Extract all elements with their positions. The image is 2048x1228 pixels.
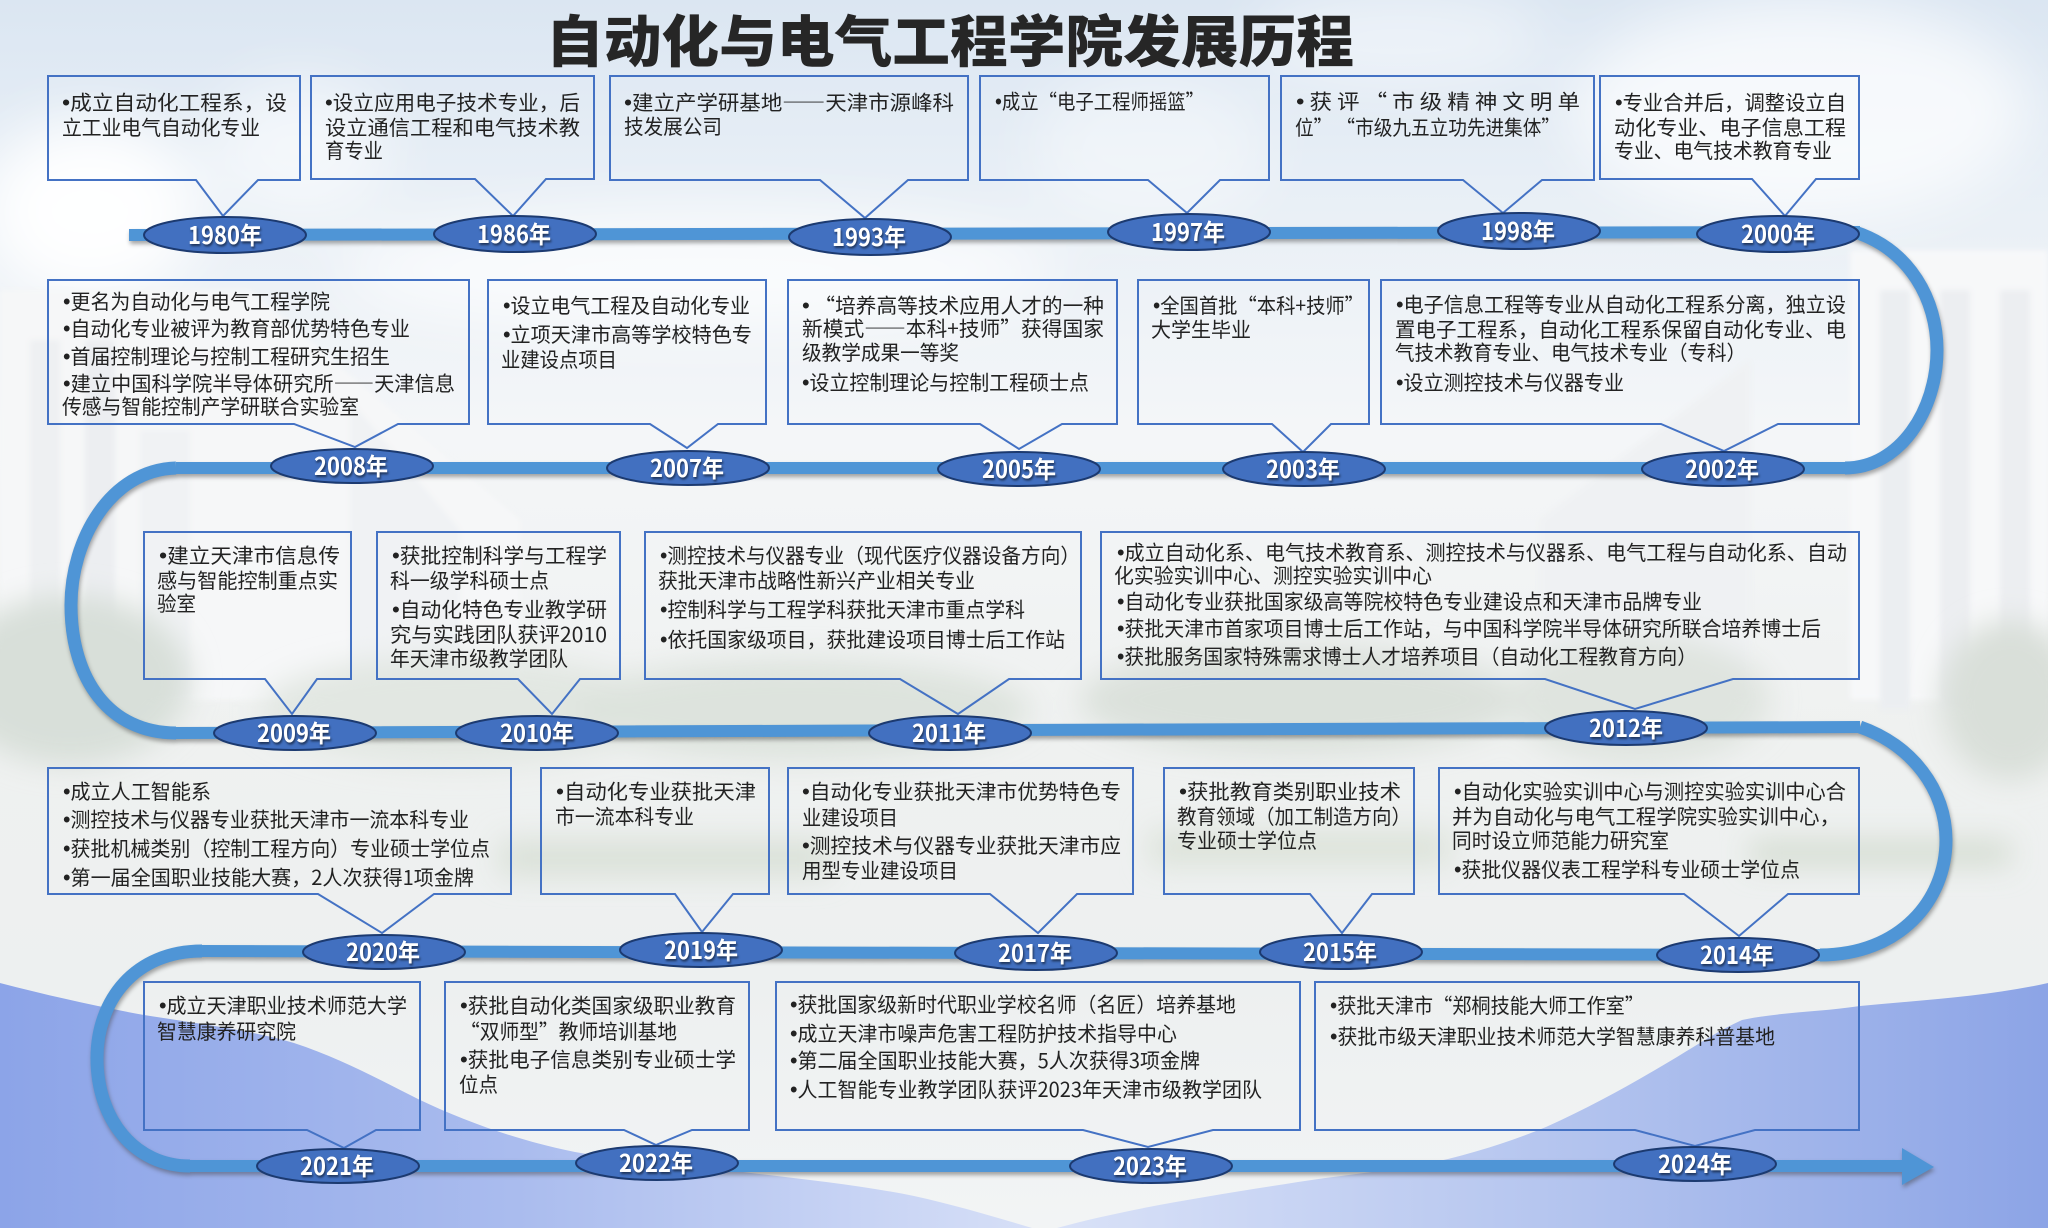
year badge 2012 [1545, 709, 1707, 745]
panel: 2020: •成立人工智能系 [63, 775, 211, 805]
year badge 1997 [1108, 213, 1270, 250]
panel: 2012: •自动化专业获批国家级高等院校特色专业建设点和天津市品牌专业 [1117, 585, 1702, 615]
panel: 2024: •获批天津市“郑桐技能大师工作室” [1330, 989, 1644, 1019]
panel: 2017: 用型专业建设项目 [802, 854, 958, 884]
year badge 2023: 2023年 [1113, 1147, 1187, 1182]
year badge 2008 [271, 447, 433, 483]
decorative blue wave, left [0, 983, 1032, 1228]
panel: 2005: 级教学成果一等奖 [802, 336, 959, 366]
panel: 2000 [1600, 76, 1859, 216]
panel: 2014: 并为自动化与电气工程学院实验实训中心， [1452, 800, 1840, 830]
panel: 2010: 科一级学科硕士点 [390, 564, 549, 594]
panel: 2005: 新模式——本科+技师”获得国家 [802, 312, 1104, 342]
panel: 1986: •设立应用电子技术专业，后 [325, 86, 580, 116]
panel: 2015: •获批教育类别职业技术 [1179, 775, 1401, 805]
panel: 2008: •自动化专业被评为教育部优势特色专业 [63, 312, 410, 342]
panel: 2010: 究与实践团队获评2010 [390, 618, 607, 648]
panel: 2003 [1138, 280, 1369, 452]
decorative blue wave, right [1032, 983, 2048, 1228]
panel: 2012: •成立自动化系、电气技术教育系、测控技术与仪器系、电气工程与自动化系、自动 [1117, 536, 1847, 566]
year badge 2011: 2011年 [912, 714, 986, 749]
panel: 1986 [311, 76, 594, 216]
panel: 2019: 市一流本科专业 [555, 800, 694, 830]
year badge 2020 [303, 933, 465, 969]
title: 自动化与电气工程学院发展历程 [546, 0, 1354, 79]
year badge 2020: 2020年 [346, 933, 420, 968]
year badge 2015 [1260, 933, 1422, 969]
panel: 2014: •获批仪器仪表工程学科专业硕士学位点 [1454, 853, 1800, 883]
panel: 2015: 教育领域（加工制造方向） [1177, 800, 1411, 830]
panel: 1997: •成立“电子工程师摇篮” [995, 85, 1204, 115]
year badge 2009: 2009年 [257, 714, 331, 749]
panel: 2021: •成立天津职业技术师范大学 [159, 989, 407, 1019]
panel: 2022: “双师型”教师培训基地 [460, 1015, 677, 1045]
panel: 2002 [1381, 280, 1859, 451]
panel: 2007: •立项天津市高等学校特色专 [503, 318, 752, 348]
year badge 2021: 2021年 [300, 1147, 374, 1182]
panel: 2008: •首届控制理论与控制工程研究生招生 [63, 340, 390, 370]
year badge 2019 [620, 931, 782, 967]
panel: 1998: 位” “市级九五立功先进集体” [1295, 111, 1560, 141]
panel: 2021: 智慧康养研究院 [157, 1015, 296, 1045]
panel: 2019: •自动化专业获批天津 [556, 775, 756, 805]
panel: 2017 [788, 768, 1133, 933]
panel: 2011: •控制科学与工程学科获批天津市重点学科 [660, 593, 1025, 623]
panel: 2023: •人工智能专业教学团队获评2023年天津市级教学团队 [790, 1073, 1262, 1103]
panel: 2020: •测控技术与仪器专业获批天津市一流本科专业 [63, 803, 469, 833]
panel: 2022: •获批自动化类国家级职业教育 [460, 989, 736, 1019]
year badge 2005 [938, 450, 1100, 486]
panel: 1986: 设立通信工程和电气技术教 [325, 111, 580, 141]
panel: 1997 [980, 76, 1269, 213]
panel: 2000: 动化专业、电子信息工程 [1614, 111, 1846, 141]
year badge 1993: 1993年 [832, 218, 906, 253]
panel: 2023: •第二届全国职业技能大赛，5人次获得3项金牌 [790, 1044, 1200, 1074]
year badge 1998 [1438, 212, 1600, 249]
panel: 2017: •测控技术与仪器专业获批天津市应 [802, 829, 1121, 859]
panel: 1993: 技发展公司 [624, 110, 722, 140]
panel: 2012 [1101, 532, 1859, 709]
year badge 2012: 2012年 [1589, 709, 1663, 744]
year badge 2022 [576, 1144, 738, 1180]
panel: 2015: 专业硕士学位点 [1177, 824, 1317, 854]
year badge 2014 [1657, 936, 1819, 972]
panel: 2009: •建立天津市信息传 [159, 539, 340, 569]
year badge 2007: 2007年 [650, 449, 724, 484]
panel: 2015 [1164, 768, 1414, 933]
year badge 2024: 2024年 [1658, 1145, 1732, 1180]
panel: 2005 [788, 280, 1117, 449]
panel: 2023 [776, 982, 1300, 1147]
timeline ribbon with arrow [71, 232, 1946, 1185]
panel: 2003: •全国首批“本科+技师” [1153, 289, 1364, 319]
panel: 2023: •成立天津市噪声危害工程防护技术指导中心 [790, 1017, 1177, 1047]
panel: 2024 [1315, 982, 1859, 1146]
panel: 1993 [610, 76, 968, 218]
panel: 2017: •自动化专业获批天津市优势特色专 [802, 775, 1121, 805]
panel: 2002: 置电子工程系，自动化工程系保留自动化专业、电 [1395, 313, 1846, 343]
year badge 2023 [1070, 1147, 1232, 1183]
year badge 2015: 2015年 [1303, 933, 1377, 968]
year badge 2008: 2008年 [314, 447, 388, 482]
panel: 2010: •自动化特色专业教学研 [392, 593, 607, 623]
year badge 2019: 2019年 [664, 931, 738, 966]
year badge 2007 [607, 449, 769, 485]
panel: 2011: •依托国家级项目，获批建设项目博士后工作站 [660, 623, 1065, 653]
panel: 2020: •第一届全国职业技能大赛，2人次获得1项金牌 [63, 861, 474, 891]
panel: 2000: 专业、电气技术教育专业 [1614, 134, 1832, 164]
panel: 2021 [144, 982, 420, 1148]
year badge 2014: 2014年 [1700, 936, 1774, 971]
panel: 1993: •建立产学研基地——天津市源峰科 [624, 86, 954, 116]
panel: 2010: •获批控制科学与工程学 [392, 539, 607, 569]
year badge 2003 [1223, 450, 1385, 486]
panel: 2014 [1439, 768, 1859, 936]
year badge 2010 [456, 714, 618, 750]
year badge 2003: 2003年 [1266, 450, 1340, 485]
year badge 2011 [869, 714, 1031, 750]
year badge 1986: 1986年 [477, 215, 551, 250]
year badge 2005: 2005年 [982, 450, 1056, 485]
panel: 1998 [1281, 76, 1594, 213]
year badge 2021 [257, 1147, 419, 1183]
panel: 2012: 化实验实训中心、测控实验实训中心 [1114, 559, 1432, 589]
panel: 2011 [645, 532, 1081, 714]
year badge 1998: 1998年 [1481, 212, 1555, 247]
year badge 1993 [789, 218, 951, 255]
year badge 1986 [434, 215, 596, 252]
panel: 2012: •获批服务国家特殊需求博士人才培养项目（自动化工程教育方向） [1117, 640, 1697, 670]
panel: 2008: 传感与智能控制产学研联合实验室 [62, 390, 359, 420]
panel: 1980 [48, 76, 300, 216]
year badge 2017: 2017年 [998, 934, 1072, 969]
panel: 2020: •获批机械类别（控制工程方向）专业硕士学位点 [63, 832, 490, 862]
year badge 2000: 2000年 [1741, 215, 1815, 250]
year badge 2009 [214, 714, 376, 750]
panel: 2010 [377, 532, 620, 714]
panel: 2008: •更名为自动化与电气工程学院 [63, 285, 330, 315]
panel: 2002: 气技术教育专业、电气技术专业（专科） [1395, 336, 1746, 366]
panel: 1980: 立工业电气自动化专业 [62, 111, 260, 141]
panel: 2017: 业建设项目 [802, 801, 898, 831]
panel: 2002: •电子信息工程等专业从自动化工程系分离，独立设 [1396, 288, 1846, 318]
year badge 1980: 1980年 [188, 216, 262, 251]
panel: 2003: 大学生毕业 [1151, 313, 1251, 343]
panel: 2008 [48, 280, 469, 447]
panel: 2022: 位点 [459, 1068, 498, 1098]
panel: 2005: •设立控制理论与控制工程硕士点 [802, 366, 1089, 396]
panel: 1986: 育专业 [325, 134, 383, 164]
year badge 2024 [1614, 1145, 1776, 1181]
panel: 2011: 获批天津市战略性新兴产业相关专业 [658, 564, 975, 594]
panel: 2005: • “培养高等技术应用人才的一种 [802, 289, 1104, 319]
panel: 1998: • 获 评 “ 市 级 精 神 文 明 单 [1296, 85, 1580, 115]
panel: 2007: 业建设点项目 [501, 343, 617, 373]
panel: 2009: 验室 [157, 587, 196, 617]
panel: 2014: 同时设立师范能力研究室 [1452, 824, 1669, 854]
panel: 2009: 感与智能控制重点实 [157, 564, 338, 594]
panel: 2014: •自动化实验实训中心与测控实验实训中心合 [1454, 775, 1846, 805]
panel: 2000: •专业合并后，调整设立自 [1615, 86, 1846, 116]
year badge 2002 [1642, 450, 1804, 486]
panel: 2010: 年天津市级教学团队 [390, 642, 568, 672]
year badge 2000 [1697, 215, 1859, 252]
panel: 2019 [541, 768, 769, 932]
panel: 2022 [445, 982, 749, 1145]
panel: 2007 [488, 280, 766, 448]
panel: 2007: •设立电气工程及自动化专业 [503, 289, 750, 319]
panel: 2023: •获批国家级新时代职业学校名师（名匠）培养基地 [790, 988, 1236, 1018]
panel: 2008: •建立中国科学院半导体研究所——天津信息 [63, 367, 455, 397]
year badge 2010: 2010年 [500, 714, 574, 749]
panel: 1980: •成立自动化工程系，设 [62, 86, 287, 116]
year badge 1997: 1997年 [1151, 213, 1225, 248]
panel: 2012: •获批天津市首家项目博士后工作站，与中国科学院半导体研究所联合培养博士后 [1117, 612, 1821, 642]
year badge 2017 [955, 934, 1117, 970]
panel: 2009 [144, 532, 351, 714]
panel: 2022: •获批电子信息类别专业硕士学 [460, 1043, 736, 1073]
year badge 2002: 2002年 [1685, 450, 1759, 485]
panel: 2024: •获批市级天津职业技术师范大学智慧康养科普基地 [1330, 1020, 1775, 1050]
panel: 2011: •测控技术与仪器专业（现代医疗仪器设备方向） [660, 539, 1080, 569]
panel: 2020 [48, 768, 511, 933]
panel: 2002: •设立测控技术与仪器专业 [1396, 366, 1624, 396]
year badge 1980 [144, 216, 306, 253]
year badge 2022: 2022年 [619, 1144, 693, 1179]
